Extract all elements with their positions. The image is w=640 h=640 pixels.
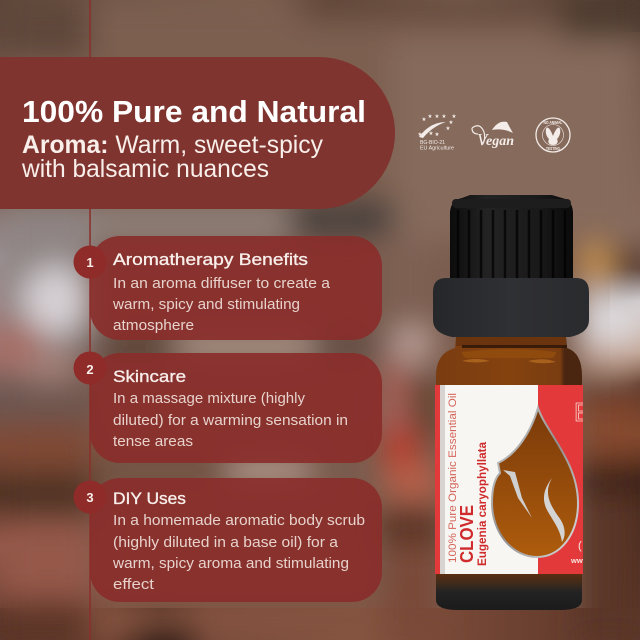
body text: effect	[113, 577, 154, 593]
number badge 2: 2	[86, 362, 94, 377]
panel: diy uses	[74, 478, 382, 602]
panel: aromatherapy benefits	[74, 236, 382, 340]
icon: EU organic logo: ★	[442, 113, 447, 120]
body text: atmosphere	[113, 318, 194, 334]
oil drop illustration	[492, 408, 578, 557]
aroma description	[21, 131, 323, 183]
body text	[112, 276, 331, 334]
icon: EU organic logo: ★	[446, 125, 451, 132]
icon: EU organic logo: ★	[422, 116, 427, 123]
number badge 2	[74, 352, 106, 384]
icon: vegan logo: V	[477, 130, 490, 149]
icon: EU organic logo: EU Agriculture	[420, 146, 454, 152]
number badge 1	[74, 246, 106, 278]
icon: vegan logo: egan	[486, 134, 514, 149]
bottle label: (	[578, 540, 582, 552]
icon: EU organic logo	[418, 113, 457, 152]
icon: no animal testing logo: NO ANIMAL	[544, 120, 563, 125]
body text: warm, spicy and stimulating	[112, 297, 300, 313]
body text	[113, 391, 348, 450]
body text: tense areas	[113, 434, 193, 450]
title: 100% Pure and Natural	[22, 94, 366, 129]
icon: EU organic logo: ★	[418, 131, 423, 138]
panel: header	[0, 57, 395, 209]
body text: diluted) for a warming sensation in	[113, 413, 348, 429]
body text: In an aroma diffuser to create a	[113, 276, 331, 292]
icon: EU organic logo: ★	[449, 119, 454, 126]
number badge 1: 1	[86, 255, 94, 270]
cap collar	[433, 278, 589, 337]
icon: EU organic logo: ★	[435, 113, 440, 120]
label text: latin name: Eugenia caryophyllata	[475, 442, 489, 566]
aroma description: Aroma: Warm, sweet-spicy	[22, 131, 323, 159]
body text: In a homemade aromatic body scrub	[113, 513, 365, 529]
number badge 3: 3	[86, 490, 94, 505]
number badge 3	[74, 480, 106, 514]
icon: EU organic logo: ★	[428, 113, 433, 120]
icon: EU organic logo: ★	[429, 130, 434, 137]
heading: Aromatherapy Benefits	[113, 250, 308, 269]
body text: (highly diluted in a base oil) for a	[113, 535, 339, 551]
heading: DIY Uses	[113, 489, 186, 508]
panel: skincare	[74, 352, 382, 463]
aroma description: with balsamic nuances	[21, 155, 269, 183]
body text: warm, spicy aroma and stimulating	[112, 556, 349, 572]
bottle glass	[436, 337, 582, 385]
icon: no animal testing logo: TESTING	[546, 146, 560, 151]
icon: EU organic logo: BG-BIO-21	[420, 140, 445, 146]
label text: clove: CLOVE	[457, 505, 477, 563]
vertical timeline line	[89, 0, 91, 640]
bottle base	[436, 574, 582, 610]
brand mark: E	[574, 397, 591, 427]
body text: In a massage mixture (highly	[113, 391, 306, 407]
icon: no animal testing logo	[536, 118, 570, 152]
dropper cap	[433, 195, 589, 337]
website text: www.	[570, 556, 590, 565]
icon: EU organic logo: ★	[452, 113, 457, 120]
icon: vegan logo	[472, 122, 514, 149]
icon: EU organic logo: ★	[435, 131, 440, 138]
bottle label	[435, 385, 591, 574]
label text: product type: 100% Pure Organic Essential Oil	[447, 393, 459, 563]
product bottle	[433, 195, 591, 610]
heading: Skincare	[113, 367, 186, 386]
body text	[112, 513, 365, 593]
